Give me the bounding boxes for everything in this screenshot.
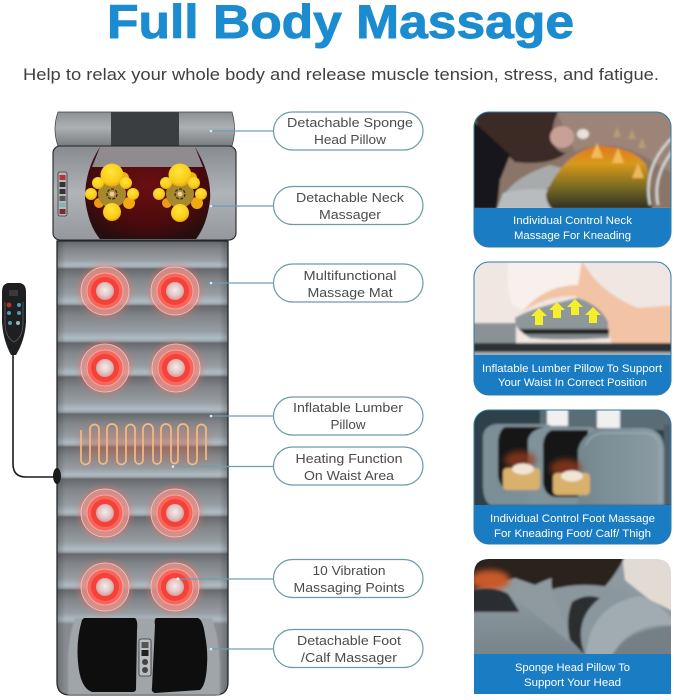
foot and calf massager bbox=[68, 618, 220, 695]
photo: neck on massager bbox=[470, 108, 674, 209]
caption: For Kneading Foot/ Calf/ Thigh bbox=[494, 528, 651, 540]
panel: neck massage bbox=[470, 108, 674, 247]
panel: foot massage bbox=[470, 406, 674, 544]
callout: multifunctional massage mat: Massage Mat bbox=[308, 286, 393, 300]
yellow arrows bbox=[531, 299, 601, 325]
callout: 10 vibration massaging points: 10 Vibration bbox=[312, 564, 386, 578]
neck massager bbox=[53, 146, 236, 240]
caption: Sponge Head Pillow To bbox=[515, 662, 630, 674]
caption: Massage For Kneading bbox=[514, 230, 631, 242]
control strip bbox=[58, 172, 67, 216]
caption bbox=[482, 363, 662, 389]
remote control bbox=[2, 283, 26, 355]
subtitle: Help to relax your whole body and release muscle tension, stress, and fatigue. bbox=[23, 66, 659, 84]
callout: detachable neck massager bbox=[210, 186, 423, 224]
callout: heating function on waist area: Heating Function bbox=[296, 452, 403, 466]
heating element bbox=[81, 424, 206, 464]
massage mat product bbox=[2, 112, 236, 700]
vibration massaging points bbox=[74, 260, 207, 618]
callout: 10 vibration massaging points bbox=[176, 560, 423, 598]
caption bbox=[513, 215, 633, 242]
callout: multifunctional massage mat bbox=[210, 264, 423, 302]
callout: detachable sponge head pillow: Head Pillow bbox=[314, 133, 387, 147]
callout: detachable foot calf massager: /Calf Massager bbox=[301, 651, 397, 665]
caption: Your Waist In Correct Position bbox=[498, 377, 647, 389]
caption: Individual Control Neck bbox=[513, 215, 633, 227]
caption: Inflatable Lumber Pillow To Support bbox=[482, 363, 662, 375]
caption: Individual Control Foot Massage bbox=[490, 513, 655, 525]
head pillow bbox=[55, 112, 234, 146]
callout: inflatable lumber pillow bbox=[210, 397, 423, 435]
callout: detachable neck massager: Detachable Neck bbox=[296, 191, 405, 205]
callout: inflatable lumber pillow: Inflatable Lumber bbox=[293, 401, 403, 415]
caption bbox=[490, 513, 655, 540]
panel: lumbar pillow bbox=[470, 258, 674, 395]
callout: detachable sponge head pillow bbox=[210, 112, 423, 150]
callout: multifunctional massage mat: Multifunctional bbox=[304, 269, 396, 283]
photo: inflatable lumbar support bbox=[474, 262, 670, 355]
foot control strip bbox=[139, 639, 151, 676]
caption bbox=[515, 662, 630, 689]
left kneading head bbox=[85, 164, 139, 221]
photo: foot massager bbox=[474, 410, 670, 505]
callout: 10 vibration massaging points: Massaging Points bbox=[294, 581, 404, 595]
cable connector bbox=[53, 468, 61, 484]
photo: sponge head pillow bbox=[474, 559, 671, 654]
caption: Support Your Head bbox=[524, 677, 621, 689]
callout: detachable foot calf massager: Detachable Foot bbox=[297, 634, 402, 648]
callout: detachable neck massager: Massager bbox=[319, 208, 381, 222]
callout: detachable sponge head pillow: Detachable Sponge bbox=[287, 116, 413, 130]
callout: inflatable lumber pillow: Pillow bbox=[330, 418, 367, 432]
callout: heating function on waist area: On Waist Area bbox=[304, 469, 394, 483]
cable bbox=[13, 355, 56, 477]
callout: heating function on waist area bbox=[172, 447, 423, 485]
callout: detachable foot calf massager bbox=[210, 630, 423, 668]
multifunctional mat body bbox=[58, 242, 228, 694]
right kneading head bbox=[153, 164, 207, 222]
panel: head pillow bbox=[470, 555, 674, 694]
